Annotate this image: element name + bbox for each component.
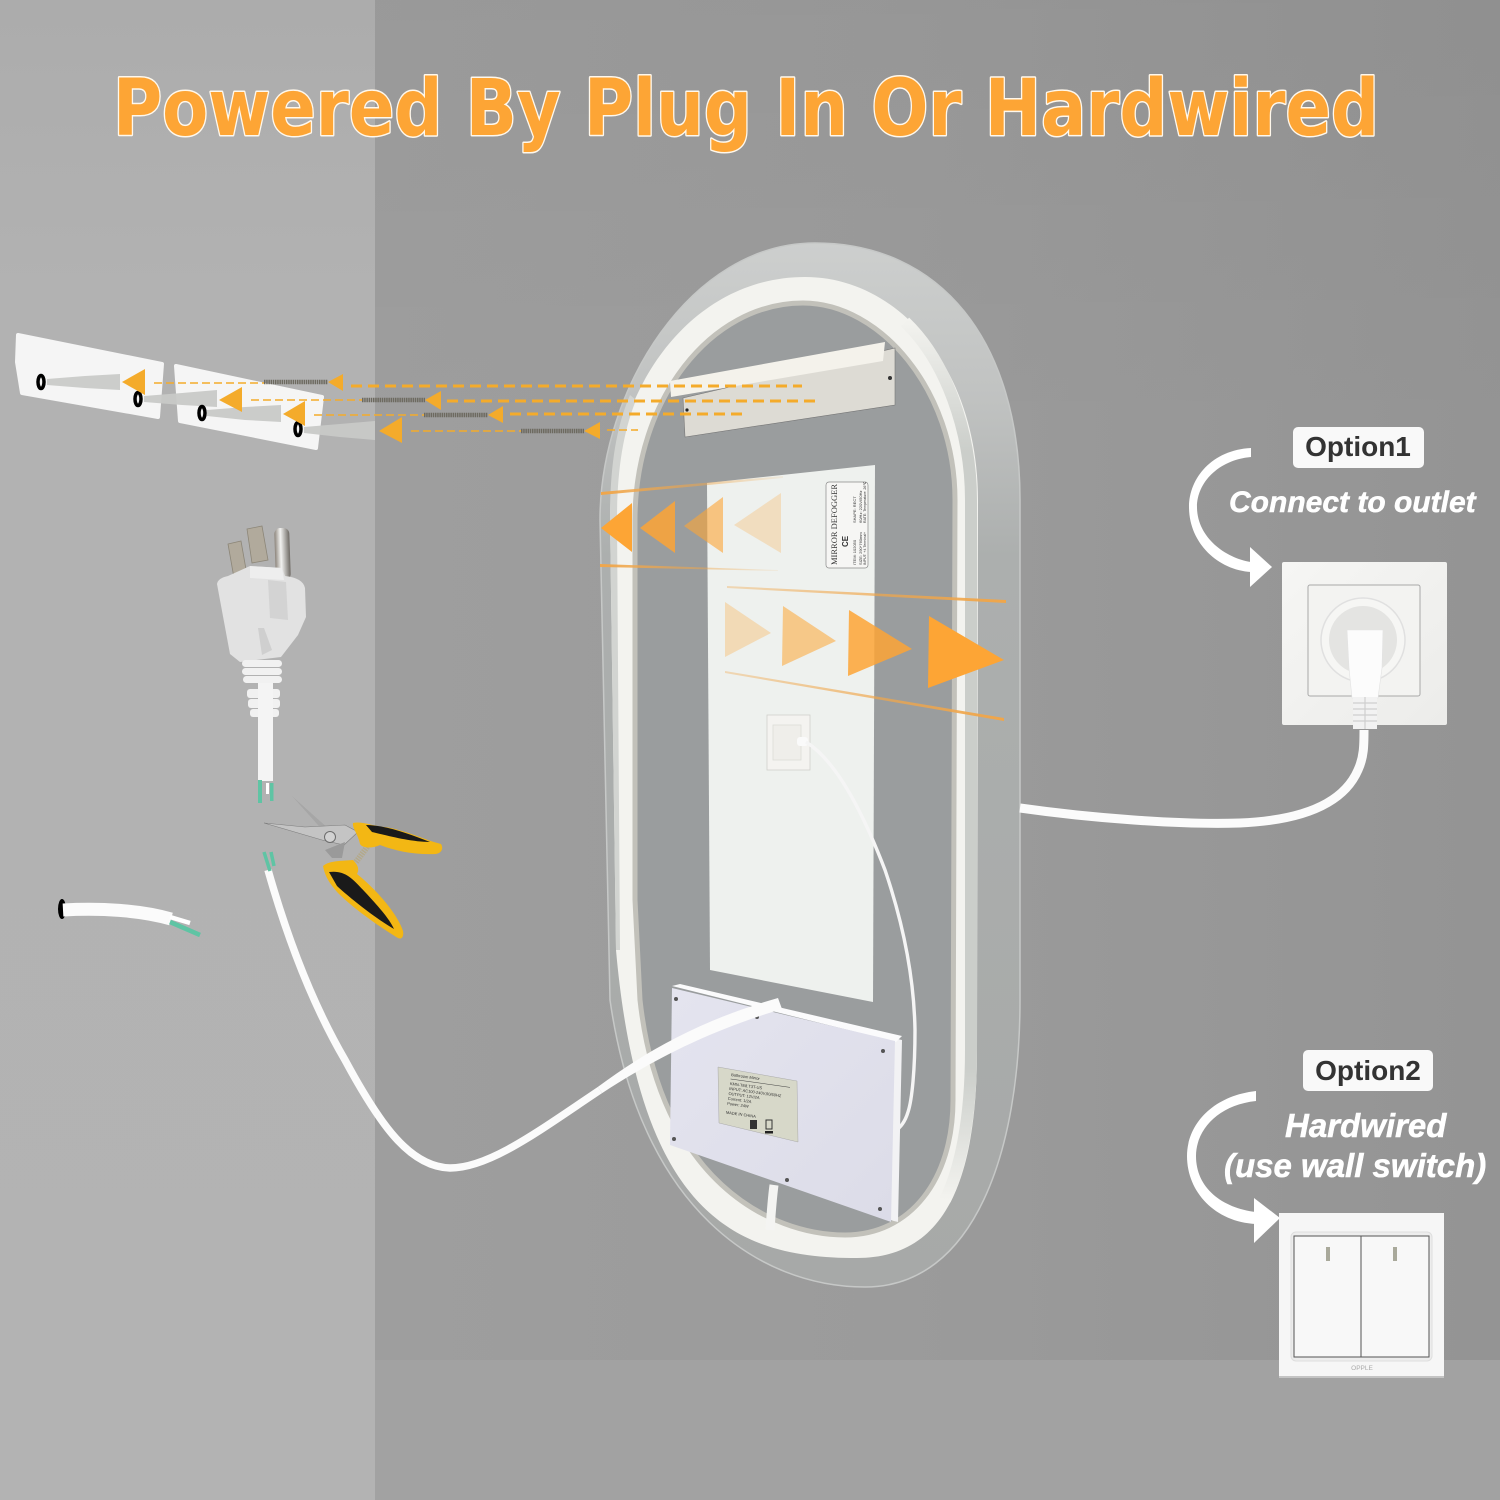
LED ring xyxy=(610,277,978,1258)
control box xyxy=(670,984,902,1230)
screw and anchor diagram xyxy=(17,335,817,448)
upper handle xyxy=(353,823,442,854)
option 2 badge: Option2 xyxy=(1315,1055,1421,1086)
left pointing arrows xyxy=(600,476,783,571)
option 1 curved arrow xyxy=(1189,448,1272,587)
defogger sticker: SIZE: 290*760mm xyxy=(858,532,863,565)
box label: Power: 24W xyxy=(727,1101,749,1109)
orange arrowheads xyxy=(122,369,600,443)
cord stub xyxy=(258,683,273,781)
strain relief xyxy=(242,660,282,717)
option 1 caption: Connect to outlet xyxy=(1229,486,1478,519)
defogger sticker: RATE: Temperature: 26℃ xyxy=(863,481,867,523)
defogger switch xyxy=(767,715,810,770)
option 2 caption xyxy=(1224,1107,1486,1184)
right pointing arrows xyxy=(725,586,1006,721)
option 1 badge xyxy=(1293,427,1424,468)
lower lead xyxy=(770,1185,774,1230)
thin dashed guides xyxy=(154,383,638,431)
back panel xyxy=(635,303,955,1235)
defogger sticker: ITEM: 102050 xyxy=(852,539,857,565)
wall switch: OPPLE xyxy=(1351,1365,1373,1372)
outlet power cable xyxy=(1020,730,1364,823)
black anchor rings xyxy=(38,376,301,436)
wall brackets xyxy=(17,335,322,448)
us plug xyxy=(217,526,306,803)
box label: KMN-TE8.T3T-US xyxy=(730,1081,763,1090)
defogger pad xyxy=(707,465,875,1002)
plug blades xyxy=(228,526,268,578)
ground pin xyxy=(274,528,291,580)
box label: INPUT: AC100-240V,50/60HZ xyxy=(729,1086,782,1098)
mirror glass edge xyxy=(600,243,1020,1287)
box label: Bathroom Mirror xyxy=(731,1072,761,1081)
defogger sticker: 60/Hz: 220V/50Hz xyxy=(858,491,863,523)
option 1 badge: Option1 xyxy=(1305,431,1411,462)
lower handle xyxy=(323,860,403,939)
spring xyxy=(356,846,368,862)
screws xyxy=(264,382,584,431)
cut wire piece xyxy=(58,899,200,935)
wall switch xyxy=(1279,1213,1444,1378)
outlet plug xyxy=(1347,630,1383,729)
cut cable leads xyxy=(264,852,274,871)
box label: Current: 1/2A xyxy=(728,1096,752,1104)
wall anchors xyxy=(47,374,375,440)
outlet xyxy=(1282,562,1447,729)
defogger sticker: CE xyxy=(841,535,850,547)
option 2 curved arrow xyxy=(1187,1091,1280,1243)
plug body xyxy=(217,566,306,662)
option 2 caption: (use wall switch) xyxy=(1224,1147,1486,1184)
thick dashed guides xyxy=(351,386,817,414)
wall bracket on mirror xyxy=(670,342,895,437)
defogger cable xyxy=(806,742,915,1130)
option 2 caption: Hardwired xyxy=(1285,1107,1447,1144)
box label: OUTPUT: 12V/2A xyxy=(728,1091,760,1100)
mirror back xyxy=(600,243,1020,1287)
defogger sticker: MIRROR DEFOGGER xyxy=(829,484,839,565)
box label xyxy=(718,1067,798,1142)
box label: MADE IN CHINA xyxy=(726,1110,757,1119)
option 2 badge xyxy=(1303,1050,1433,1091)
stripped leads xyxy=(258,780,274,803)
defogger sticker: SHAPE: RECT xyxy=(852,496,857,523)
cutting pliers xyxy=(264,796,442,939)
defogger sticker xyxy=(826,481,868,568)
defogger sticker: INPUT: +4 Terminal+ xyxy=(863,532,867,565)
main power cable xyxy=(264,852,782,1168)
